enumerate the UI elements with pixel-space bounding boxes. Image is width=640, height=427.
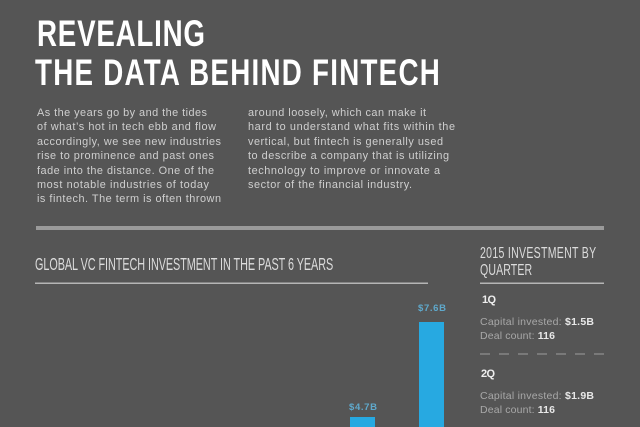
intro text: left column: most notable industries of today: [37, 179, 210, 191]
title: [35, 12, 440, 93]
intro text: right column: technology to improve or innovate a: [248, 165, 441, 177]
intro text: left column: accordingly, we see new industries: [37, 136, 222, 148]
intro text: left column: As the years go by and the tides: [37, 107, 208, 119]
bar chart: [349, 303, 446, 427]
1Q block: Capital invested: $1.5B: [480, 316, 594, 328]
2Q block: 2Q: [481, 368, 495, 380]
intro text: left column: is fintech. The term is often thrown: [37, 193, 221, 205]
title: THE DATA BEHIND FINTECH: [35, 51, 440, 93]
intro text: right column: sector of the financial industry.: [248, 179, 412, 191]
intro text: left column: [37, 107, 222, 205]
quarter panel: [480, 244, 604, 416]
2Q block: Capital invested: $1.9B: [480, 390, 594, 402]
title: REVEALING: [37, 12, 205, 54]
bar: $4.7B: $4.7B: [349, 402, 377, 413]
intro text: right column: to describe a company that is utilizing: [248, 150, 449, 162]
1Q block: Deal count: 116: [480, 330, 555, 342]
intro text: right column: vertical, but fintech is generally used: [248, 136, 443, 148]
1Q block: [480, 294, 594, 342]
bar: $7.6B: $7.6B: [418, 303, 446, 314]
quarter panel heading: QUARTER: [480, 261, 532, 279]
intro text: right column: around loosely, which can make it: [248, 107, 426, 119]
intro text: right column: hard to understand what fits within the: [248, 121, 455, 133]
intro text: right column: [248, 107, 455, 191]
2Q block: Deal count: 116: [480, 404, 555, 416]
quarter panel heading: 2015 INVESTMENT BY: [480, 244, 596, 262]
quarter panel heading: [480, 244, 596, 279]
chart heading: GLOBAL VC FINTECH INVESTMENT IN THE PAST 6 YEARS: [35, 256, 333, 275]
2Q block: [480, 368, 594, 416]
intro text: left column: fade into the distance. One of the: [37, 165, 214, 177]
intro text: left column: rise to prominence and past ones: [37, 150, 215, 162]
intro text: left column: of what’s hot in tech ebb and flow: [37, 121, 216, 133]
1Q block: 1Q: [482, 294, 496, 306]
